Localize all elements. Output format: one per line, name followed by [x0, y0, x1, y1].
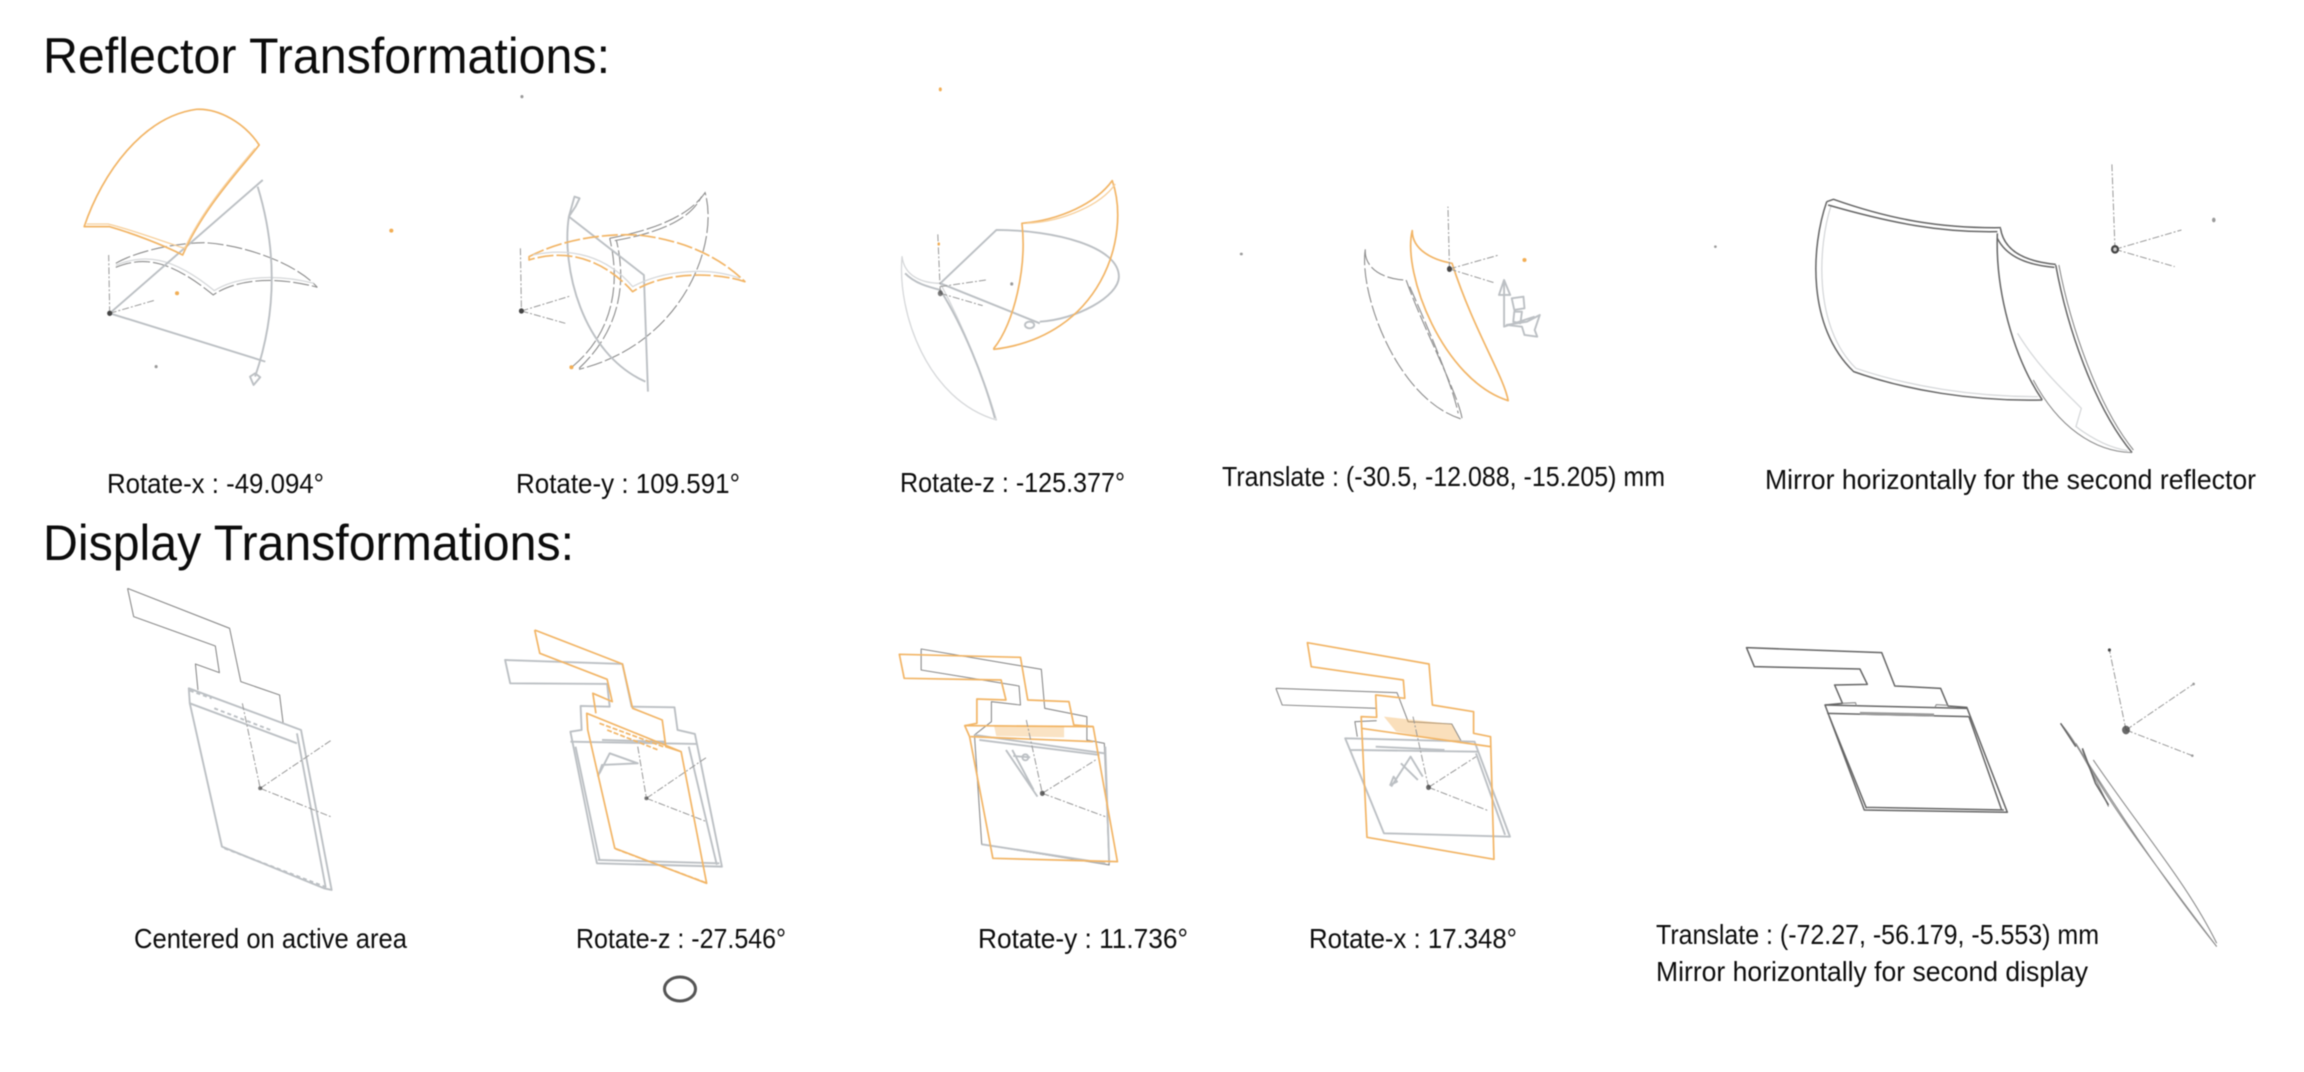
diagram: display rotated about x [1276, 643, 1510, 859]
diagram: translated display [1746, 648, 2007, 812]
diagram: display rotated about z [505, 630, 722, 883]
panel: display rotate-x [1276, 643, 1517, 954]
icon: stray ring [664, 977, 696, 1001]
diagram: display centered on active area [128, 588, 332, 890]
label: translate value: Translate : (-30.5, -12.088, -15.205) mm [1222, 461, 1665, 492]
label: centered on active area: Centered on active area [134, 923, 408, 954]
panel: display rotate-y [899, 649, 1188, 954]
label: rotate-x value: Rotate-x : 17.348° [1309, 923, 1517, 954]
heading: Reflector Transformations: Reflector Transformations: [43, 28, 610, 84]
diagram: reflector rotated about y [519, 95, 745, 392]
panel: display rotate-z [505, 630, 786, 1001]
label: mirror note: Mirror horizontally for second display [1656, 956, 2088, 987]
label: rotate-y value: Rotate-y : 11.736° [978, 923, 1188, 954]
panel: display translate and mirror [1656, 648, 2217, 987]
panel: reflector rotate-x [84, 109, 393, 499]
panel: reflector translate [1222, 207, 1665, 492]
label: rotate-x value: Rotate-x : -49.094° [107, 468, 324, 499]
diagram: display side view with axes [2061, 648, 2217, 947]
panel: reflector rotate-y [516, 95, 745, 499]
diagram: display rotated about y [899, 649, 1117, 865]
diagram: reflector translated [1240, 207, 1540, 419]
panel: reflector rotate-z [900, 87, 1125, 498]
label: rotate-y value: Rotate-y : 109.591° [516, 468, 740, 499]
diagram: reflector rotated about x [84, 109, 393, 385]
label: translate value: Translate : (-72.27, -56.179, -5.553) mm [1656, 919, 2099, 950]
panel: reflector mirror [1714, 163, 2256, 495]
label: rotate-z value: Rotate-z : -125.377° [900, 467, 1125, 498]
diagram: mirrored reflector [1714, 163, 2216, 453]
label: rotate-z value: Rotate-z : -27.546° [576, 923, 786, 954]
diagram: reflector rotated about z [901, 87, 1119, 420]
panel: display centered [128, 588, 408, 954]
heading: Display Transformations: Display Transformations: [43, 515, 574, 571]
label: mirror note: Mirror horizontally for the second reflector [1765, 464, 2256, 495]
